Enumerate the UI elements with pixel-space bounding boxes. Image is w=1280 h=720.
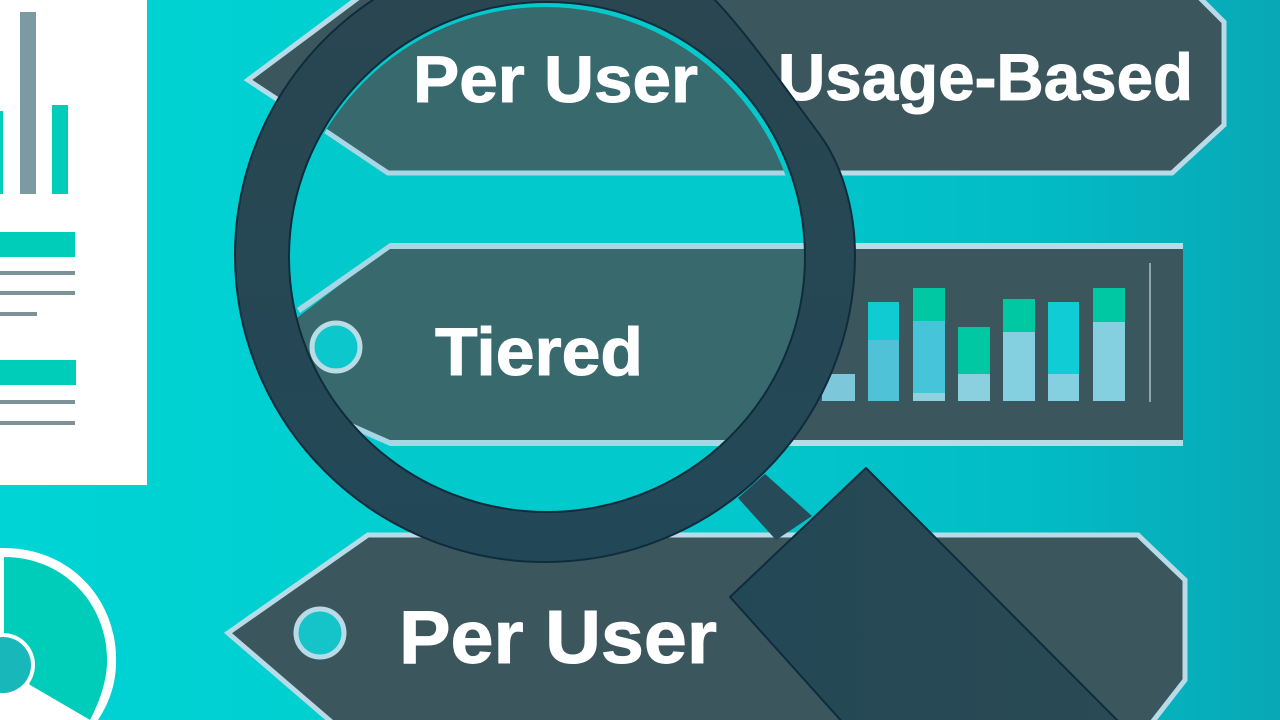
tag: per user (bottom) bbox=[228, 535, 1185, 720]
icon: hole bbox=[296, 609, 344, 657]
label: Tiered: Tiered bbox=[435, 314, 643, 390]
mini bar chart bbox=[0, 12, 68, 194]
text block 1 bbox=[0, 232, 75, 316]
tag: tiered bbox=[262, 243, 1183, 446]
icon: hole bbox=[312, 323, 360, 371]
tag: usage-based bbox=[248, 0, 1224, 173]
lens ring bbox=[235, 0, 855, 562]
handle grip bbox=[730, 468, 1122, 720]
text block 2 bbox=[0, 360, 76, 425]
label: Usage-Based: Usage-Based bbox=[778, 40, 1193, 114]
label: Per User: Per User bbox=[413, 42, 698, 116]
stacked bar chart bbox=[822, 263, 1151, 402]
donut chart bbox=[0, 548, 116, 720]
handle neck bbox=[738, 474, 812, 540]
label: Per User: Per User bbox=[399, 595, 717, 679]
lens interior bbox=[297, 3, 804, 446]
panel: report document bbox=[0, 0, 147, 485]
magnifying glass bbox=[234, 0, 1118, 720]
